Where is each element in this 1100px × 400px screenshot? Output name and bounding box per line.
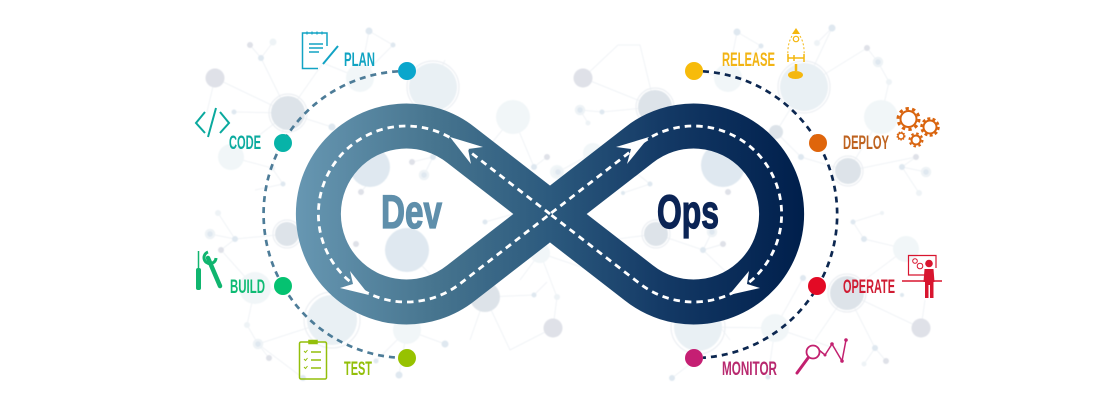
icon: clipboard checklist — [300, 340, 326, 379]
stage: PLAN — [302, 32, 416, 80]
label: TEST — [344, 359, 372, 380]
icon: screwdriver and wrench — [196, 251, 220, 290]
icon: magnifier and trend line — [797, 338, 848, 373]
stage: CODE — [196, 108, 292, 154]
label: RELEASE — [722, 50, 775, 71]
stage: TEST — [300, 340, 416, 380]
infinity loop road — [318, 126, 782, 302]
icon: notebook and pen — [302, 32, 338, 68]
heading: Dev: Dev — [381, 185, 442, 238]
label: OPERATE — [843, 277, 895, 298]
dashed arc: Ops stages — [703, 71, 837, 358]
arrow: lower left — [340, 271, 369, 295]
heading: Ops: Ops — [657, 185, 719, 238]
icon: rocket — [788, 28, 804, 79]
node — [685, 62, 703, 80]
stage: MONITOR — [685, 338, 848, 380]
label: BUILD — [230, 277, 265, 298]
node — [685, 349, 703, 367]
dashed arc: Dev stages — [264, 71, 398, 358]
icon: code brackets — [196, 108, 229, 137]
arrow: upper left — [450, 137, 483, 164]
label: DEPLOY — [843, 133, 889, 154]
stage: RELEASE — [685, 28, 804, 80]
node — [274, 134, 292, 152]
label: CODE — [229, 133, 261, 154]
stage: DEPLOY — [809, 108, 938, 154]
arrow: upper right — [616, 137, 649, 164]
background network of nodes — [206, 24, 930, 381]
icon: presenter at screen — [902, 256, 942, 298]
label: PLAN — [344, 50, 375, 71]
road centre dashes — [318, 126, 782, 302]
icon: gears — [897, 108, 938, 146]
label: MONITOR — [722, 359, 777, 380]
node — [809, 134, 827, 152]
stage: OPERATE — [808, 256, 942, 298]
node — [398, 62, 416, 80]
node — [808, 277, 826, 295]
stage: BUILD — [196, 251, 292, 298]
node — [398, 349, 416, 367]
arrow: lower right — [729, 271, 760, 295]
node — [274, 277, 292, 295]
